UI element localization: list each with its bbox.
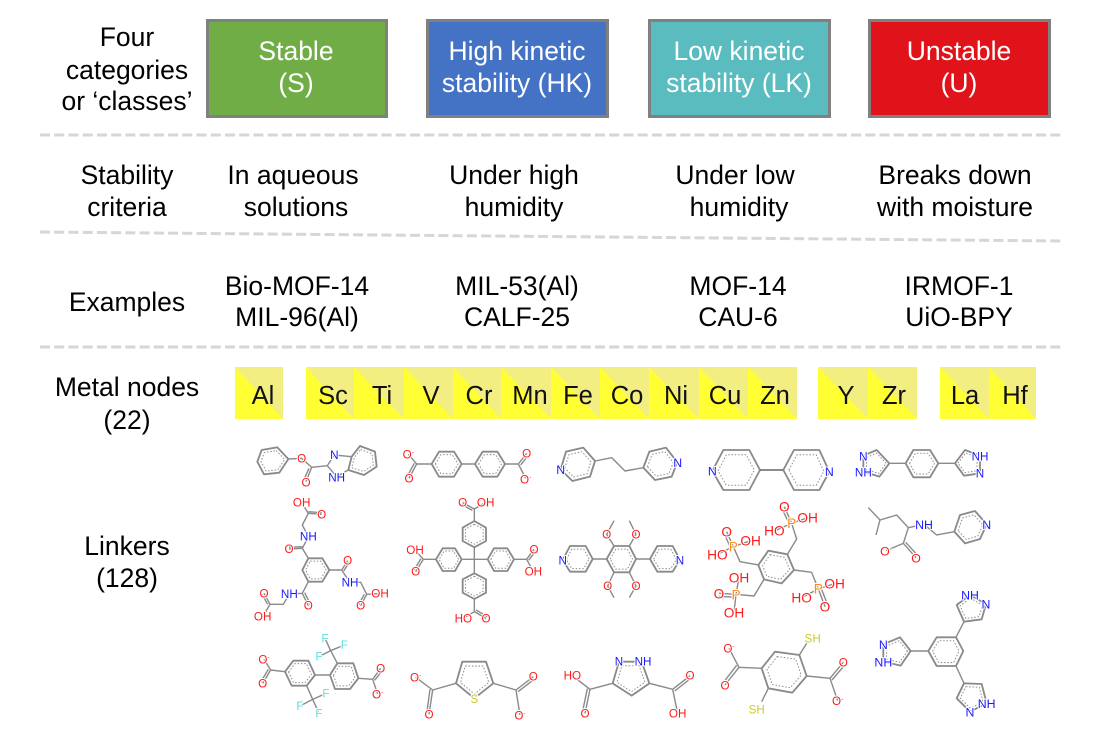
linker: thiophene dicarboxylate: O bbox=[410, 671, 419, 684]
linker: tetrakis phosphonomethyl benzene: P bbox=[787, 516, 796, 531]
class box: low kinetic stability bbox=[650, 20, 830, 116]
linker: tris pyrazolyl benzene: N bbox=[966, 705, 974, 719]
class box: unstable: (U) bbox=[941, 68, 977, 98]
row heading: four categories or classes: Four bbox=[100, 22, 154, 52]
linker: pyrazole dicarboxylate: HO bbox=[564, 670, 581, 683]
metal node tiles: Zn bbox=[760, 382, 790, 410]
linker: bis trifluoromethyl biphenyl dicarboxylate: O bbox=[258, 653, 267, 666]
linker: bipyridyl ethane bbox=[556, 448, 682, 481]
linker: biphenyl dicarboxylate: - bbox=[529, 474, 531, 481]
row: examples: MIL-96(Al) bbox=[235, 302, 359, 332]
linker: dimercapto terephthalate: O bbox=[720, 679, 730, 692]
linker: trimesoyl triglycine: O bbox=[304, 600, 313, 613]
linker: leucine pyridylmethyl: - bbox=[890, 546, 892, 553]
linker: dimercapto terephthalate: - bbox=[732, 643, 735, 650]
linker grid bottom right block bbox=[564, 588, 996, 721]
row heading: four categories or classes: or ‘classes’ bbox=[61, 86, 193, 116]
linker: trimesoyl triglycine: O bbox=[343, 555, 352, 568]
row: stability criteria: with moisture bbox=[876, 192, 1033, 222]
linker: tetrakis phosphonomethyl benzene bbox=[707, 500, 845, 620]
linker: tetramethoxy phenylene bipyridine: O bbox=[631, 528, 641, 541]
linker: tetramethoxy phenylene bipyridine: O bbox=[602, 528, 611, 541]
metal node tiles: Cr bbox=[466, 382, 493, 410]
linker: bis pyrazolyl benzene: NH bbox=[855, 466, 872, 479]
row: examples: Examples bbox=[69, 287, 185, 317]
row: stability criteria: criteria bbox=[87, 192, 167, 222]
linker: biphenyl dicarboxylate: O bbox=[520, 473, 529, 486]
row heading: linkers: Linkers bbox=[84, 531, 170, 561]
linker: tetrakis carboxyphenyl methane: OH bbox=[477, 497, 494, 510]
linker: tetramethoxy phenylene bipyridine: N bbox=[558, 554, 567, 567]
row heading: linkers: (128) bbox=[96, 563, 158, 593]
linker: tetrakis carboxyphenyl methane: O bbox=[529, 543, 539, 556]
linker: thiophene dicarboxylate: O bbox=[424, 709, 434, 722]
linker: tetrakis phosphonomethyl benzene: O bbox=[820, 600, 830, 615]
linker: phenyl benzimidazole carboxylate: O bbox=[301, 476, 311, 489]
linker: trimesoyl triglycine: NH bbox=[300, 531, 317, 544]
metal node tiles: Cu bbox=[709, 382, 741, 410]
linker: tetrakis phosphonomethyl benzene: O bbox=[714, 586, 724, 601]
linker: bipyridine: N bbox=[825, 465, 834, 479]
metal node tiles: V bbox=[422, 382, 440, 410]
class box: unstable: Unstable bbox=[907, 36, 1011, 66]
metal node tiles: Ni bbox=[664, 382, 688, 410]
row: stability criteria: In aqueous bbox=[227, 160, 359, 190]
linker: thiophene dicarboxylate: O bbox=[529, 671, 538, 684]
linker: bis trifluoromethyl biphenyl dicarboxylate: F bbox=[315, 651, 323, 664]
linker: phenyl benzimidazole carboxylate: NH bbox=[328, 471, 345, 484]
linker: biphenyl dicarboxylate bbox=[403, 447, 531, 486]
linker: bipyridine: N bbox=[708, 464, 717, 478]
linker: pyrazole dicarboxylate: N bbox=[615, 656, 623, 669]
row: examples: CALF-25 bbox=[464, 302, 570, 332]
linker: pyrazole dicarboxylate: NH bbox=[635, 656, 651, 669]
metal node tiles: Sc bbox=[318, 382, 348, 410]
linker: bis trifluoromethyl biphenyl dicarboxylate bbox=[258, 632, 385, 720]
linker: bis trifluoromethyl biphenyl dicarboxylate: O bbox=[258, 677, 267, 690]
linker: bipyridyl ethane: N bbox=[556, 463, 565, 477]
metal node tiles: Mn bbox=[512, 382, 548, 410]
class box: stable bbox=[208, 20, 386, 116]
linker: bis trifluoromethyl biphenyl dicarboxylate: - bbox=[267, 654, 270, 661]
row: examples: IRMOF-1 bbox=[905, 271, 1013, 301]
linker: tetrakis carboxyphenyl methane: OH bbox=[406, 544, 424, 557]
linker: trimesoyl triglycine: O bbox=[284, 543, 294, 556]
linker: bis trifluoromethyl biphenyl dicarboxylate: F bbox=[322, 687, 330, 700]
linker: dimercapto terephthalate: SH bbox=[749, 703, 765, 716]
linker: phenyl benzimidazole carboxylate: O bbox=[297, 452, 306, 465]
linker: tetrakis carboxyphenyl methane: OH bbox=[525, 566, 542, 579]
linker: trimesoyl triglycine: O bbox=[356, 600, 365, 613]
row: examples: Bio-MOF-14 bbox=[225, 271, 369, 301]
linker: thiophene dicarboxylate bbox=[410, 662, 538, 722]
linker: dimercapto terephthalate: O bbox=[839, 656, 848, 669]
linker: trimesoyl triglycine: NH bbox=[342, 576, 358, 589]
linker: tetrakis phosphonomethyl benzene: P bbox=[729, 539, 738, 554]
class box: stable: Stable bbox=[258, 36, 334, 66]
linker: leucine pyridylmethyl bbox=[868, 508, 991, 565]
linker: trimesoyl triglycine bbox=[254, 497, 389, 624]
linker: tetrakis phosphonomethyl benzene: HO bbox=[707, 547, 728, 562]
linker: trimesoyl triglycine: OH bbox=[293, 497, 310, 510]
linker: tris pyrazolyl benzene: N bbox=[879, 638, 888, 652]
linker: bis pyrazolyl benzene: N bbox=[976, 468, 984, 481]
linker: trimesoyl triglycine: O bbox=[259, 587, 269, 600]
row: examples bbox=[69, 271, 1013, 332]
linker: tetrakis carboxyphenyl methane: O bbox=[458, 497, 467, 510]
linker: thiophene dicarboxylate: S bbox=[470, 693, 478, 706]
row heading: metal nodes: (22) bbox=[103, 405, 151, 435]
linker: bipyridine bbox=[708, 450, 834, 490]
metal node tiles: Y bbox=[837, 382, 855, 410]
linker: tetramethoxy phenylene bipyridine: O bbox=[631, 580, 641, 593]
linker: bis pyrazolyl benzene: NH bbox=[972, 450, 988, 463]
linker: tetrakis phosphonomethyl benzene: P bbox=[814, 582, 823, 597]
linker: tetrakis phosphonomethyl benzene: O bbox=[721, 525, 732, 540]
linker: tetrakis phosphonomethyl benzene: HO bbox=[764, 524, 785, 539]
linker: pyrazole dicarboxylate: OH bbox=[669, 708, 686, 721]
linker: pyrazole dicarboxylate: O bbox=[580, 708, 590, 721]
linker: tetrakis phosphonomethyl benzene: OH bbox=[724, 605, 744, 620]
row: stability criteria: humidity bbox=[465, 192, 564, 222]
linker grid bottom left block bbox=[258, 632, 538, 722]
linker grid left block bbox=[254, 446, 542, 625]
linker: tetrakis phosphonomethyl benzene: P bbox=[731, 587, 741, 602]
linker: phenyl benzimidazole carboxylate: N bbox=[330, 449, 339, 462]
linker: pyrazole dicarboxylate bbox=[564, 656, 695, 721]
class box: high kinetic stability: stability (HK) bbox=[442, 68, 592, 98]
linker: biphenyl dicarboxylate: O bbox=[522, 447, 531, 460]
row: examples: CAU-6 bbox=[698, 302, 778, 332]
row heading: four categories or classes bbox=[61, 22, 193, 116]
linker: biphenyl dicarboxylate: - bbox=[412, 449, 414, 456]
linker: tetrakis phosphonomethyl benzene: HO bbox=[791, 590, 812, 605]
linker: tetrakis carboxyphenyl methane: HO bbox=[455, 612, 472, 625]
linker: leucine pyridylmethyl: O bbox=[880, 544, 890, 558]
row: stability criteria: solutions bbox=[244, 192, 348, 222]
metal node tiles: La bbox=[951, 382, 980, 410]
row heading: metal nodes: Metal nodes bbox=[55, 372, 199, 402]
linker: biphenyl dicarboxylate: O bbox=[404, 472, 414, 485]
class box: unstable bbox=[870, 20, 1050, 116]
row: examples: UiO-BPY bbox=[905, 302, 1013, 332]
linker: leucine pyridylmethyl: NH bbox=[915, 518, 933, 532]
linker: tetrakis carboxyphenyl methane bbox=[406, 497, 542, 625]
linker: dimercapto terephthalate: - bbox=[841, 696, 843, 703]
row heading: four categories or classes: categories bbox=[66, 55, 188, 85]
metal node tiles: Zr bbox=[882, 382, 907, 410]
linker: tetrakis phosphonomethyl benzene: OH bbox=[824, 577, 845, 592]
linker: tetrakis phosphonomethyl benzene: OH bbox=[740, 533, 761, 548]
linker: bis trifluoromethyl biphenyl dicarboxylate: F bbox=[296, 700, 304, 713]
linker: tetrakis phosphonomethyl benzene: OH bbox=[729, 571, 749, 586]
class box: stable: (S) bbox=[278, 68, 314, 98]
linker: tetrakis phosphonomethyl benzene: O bbox=[779, 500, 790, 515]
row: stability criteria bbox=[81, 160, 1033, 222]
linker: bis trifluoromethyl biphenyl dicarboxylate: F bbox=[341, 639, 348, 652]
linker: phenyl benzimidazole carboxylate bbox=[257, 446, 377, 489]
linker: bis trifluoromethyl biphenyl dicarboxylate: F bbox=[315, 707, 323, 720]
linker: bis pyrazolyl benzene: N bbox=[859, 450, 868, 463]
linker: thiophene dicarboxylate: - bbox=[523, 710, 526, 717]
linker: tetrakis carboxyphenyl methane: O bbox=[411, 566, 420, 579]
linker: tris pyrazolyl benzene: N bbox=[982, 598, 990, 612]
metal node tiles: Ti bbox=[372, 382, 392, 410]
row: stability criteria: Breaks down bbox=[878, 160, 1032, 190]
linker: thiophene dicarboxylate: O bbox=[514, 709, 523, 722]
row: stability criteria: humidity bbox=[690, 192, 789, 222]
linker: bis trifluoromethyl biphenyl dicarboxylate: F bbox=[321, 632, 329, 645]
linker: dimercapto terephthalate: SH bbox=[805, 632, 821, 645]
metal node tiles: Co bbox=[611, 382, 643, 410]
row heading: metal nodes bbox=[55, 372, 199, 435]
linker: trimesoyl triglycine: OH bbox=[254, 611, 271, 624]
linker: tris pyrazolyl benzene: NH bbox=[961, 588, 979, 602]
linker: bis trifluoromethyl biphenyl dicarboxylate: O bbox=[372, 688, 381, 701]
linker grid middle block bbox=[556, 448, 845, 620]
linker: tetrakis carboxyphenyl methane: O bbox=[481, 612, 491, 625]
metal node tiles: Al bbox=[252, 382, 274, 410]
linker: bis pyrazolyl benzene bbox=[855, 450, 988, 481]
linker: trimesoyl triglycine: NH bbox=[281, 588, 298, 601]
metal node tiles: Fe bbox=[563, 382, 593, 410]
row heading: linkers bbox=[84, 531, 170, 593]
class box: low kinetic stability: Low kinetic bbox=[673, 36, 805, 66]
linker: bipyridyl ethane: N bbox=[673, 456, 682, 470]
row: examples: MOF-14 bbox=[689, 271, 787, 301]
row: stability criteria: Stability bbox=[81, 160, 174, 190]
linker: dimercapto terephthalate: O bbox=[723, 642, 732, 655]
row: stability criteria: Under low bbox=[675, 160, 796, 190]
linker: tetramethoxy phenylene bipyridine: O bbox=[603, 580, 612, 593]
linker: trimesoyl triglycine: O bbox=[317, 508, 326, 521]
linker: tris pyrazolyl benzene: NH bbox=[978, 697, 996, 711]
metal node tiles: Hf bbox=[1002, 382, 1029, 410]
linker: tetrakis phosphonomethyl benzene: OH bbox=[797, 510, 818, 525]
linker: dimercapto terephthalate: O bbox=[832, 695, 841, 708]
linker: bis trifluoromethyl biphenyl dicarboxylate: - bbox=[381, 689, 383, 696]
row: stability criteria: Under high bbox=[449, 160, 579, 190]
class box: high kinetic stability bbox=[428, 20, 608, 116]
linker: trimesoyl triglycine: OH bbox=[371, 588, 389, 601]
linker: biphenyl dicarboxylate: O bbox=[403, 448, 412, 461]
linker: tetramethoxy phenylene bipyridine: N bbox=[676, 554, 684, 567]
linker: pyrazole dicarboxylate: O bbox=[685, 670, 695, 683]
linker: thiophene dicarboxylate: - bbox=[419, 672, 421, 679]
linker: tetramethoxy phenylene bipyridine bbox=[558, 521, 684, 598]
linker: leucine pyridylmethyl: O bbox=[911, 551, 921, 565]
class box: low kinetic stability: stability (LK) bbox=[666, 68, 812, 98]
linker: tris pyrazolyl benzene: NH bbox=[874, 655, 892, 669]
linker grid right block bbox=[855, 450, 991, 565]
row: examples: MIL-53(Al) bbox=[455, 271, 579, 301]
linker: dimercapto terephthalate bbox=[720, 632, 848, 716]
metal node tiles bbox=[235, 367, 1036, 419]
linker: tris pyrazolyl benzene bbox=[874, 588, 996, 719]
linker: bis trifluoromethyl biphenyl dicarboxylate: O bbox=[376, 662, 385, 675]
class box: high kinetic stability: High kinetic bbox=[449, 36, 585, 66]
linker: leucine pyridylmethyl: N bbox=[982, 518, 991, 532]
